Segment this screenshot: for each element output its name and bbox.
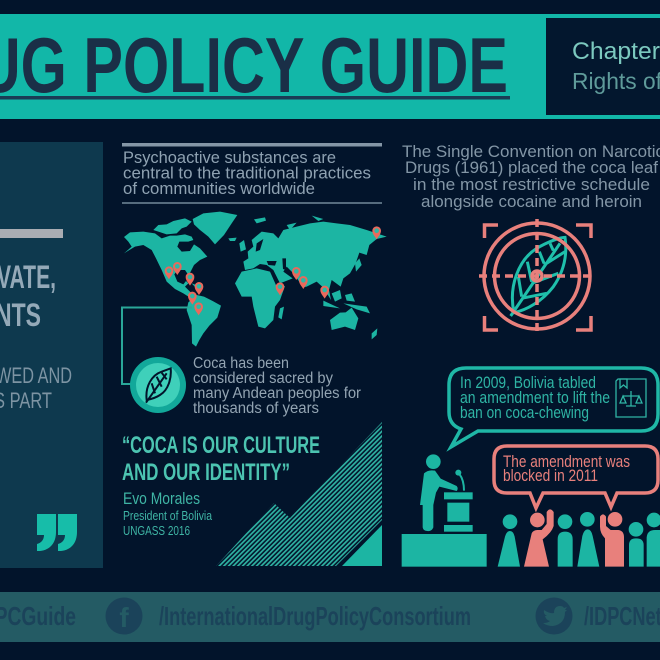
icon: closing quote marks [37, 514, 77, 551]
coca text: Coca has been [193, 355, 289, 372]
quote: Evo Morales: “COCA IS OUR CULTURE [122, 432, 320, 459]
panel: left quote [0, 142, 103, 568]
map pins [165, 226, 381, 315]
speech bubble: 2009 amendment [449, 368, 658, 447]
connector line [122, 308, 192, 384]
panel: psychoactive text: central to the traditional practices [123, 164, 371, 182]
icon: leaf in target [479, 219, 596, 334]
speech bubble: 2009 amendment: In 2009, Bolivia tabled [460, 373, 596, 392]
chapter box [546, 18, 660, 115]
quote: Evo Morales: UNGASS 2016 [123, 524, 190, 538]
icon: legal document with scales [616, 379, 646, 417]
quote: Evo Morales: President of Bolivia [123, 509, 212, 523]
icon: coca leaf circle [130, 357, 186, 413]
icon: facebook [106, 598, 142, 634]
audience [498, 509, 660, 567]
panel: psychoactive text: Psychoactive substances are [123, 148, 336, 167]
coca text: considered sacred by [193, 370, 333, 387]
coca text [193, 355, 361, 417]
Europe, Asia, Africa, Oceania [235, 216, 387, 339]
header band [0, 14, 660, 119]
convention text: The Single Convention on Narcotic [402, 142, 660, 161]
quote: Evo Morales: Evo Morales [123, 489, 200, 508]
convention text: in the most restrictive schedule [413, 175, 650, 194]
speaker at podium [402, 454, 487, 567]
speech bubble: 2009 amendment: ban on coca-chewing [460, 403, 589, 422]
world map [124, 212, 387, 347]
title underline [0, 96, 510, 100]
chapter box: Chapter [572, 38, 660, 65]
hatched mountains [216, 422, 382, 566]
convention text [402, 142, 660, 211]
speech bubble: blocked in 2011: The amendment was [503, 452, 630, 471]
panel: psychoactive text [122, 143, 382, 204]
Americas [124, 212, 237, 347]
coca text: many Andean peoples for [193, 385, 361, 402]
coca text: thousands of years [193, 400, 319, 417]
footer: facebook handle: /InternationalDrugPolicyConsortium [159, 601, 471, 631]
convention text: Drugs (1961) placed the coca leaf [405, 158, 658, 177]
icon: facebook: f [119, 602, 129, 633]
icon: twitter [536, 598, 572, 634]
quote bar [0, 229, 63, 238]
speech bubble: blocked in 2011: blocked in 2011 [503, 466, 598, 485]
quote: Evo Morales [122, 432, 320, 538]
footer band [0, 592, 660, 642]
speech bubble: blocked in 2011 [494, 446, 658, 508]
inland seas [256, 239, 286, 270]
convention text: alongside cocaine and heroin [421, 192, 642, 211]
panel: psychoactive text: of communities worldwide [123, 179, 315, 198]
quote: Evo Morales: AND OUR IDENTITY” [122, 459, 290, 486]
speech bubble: 2009 amendment: an amendment to lift the [460, 388, 610, 407]
